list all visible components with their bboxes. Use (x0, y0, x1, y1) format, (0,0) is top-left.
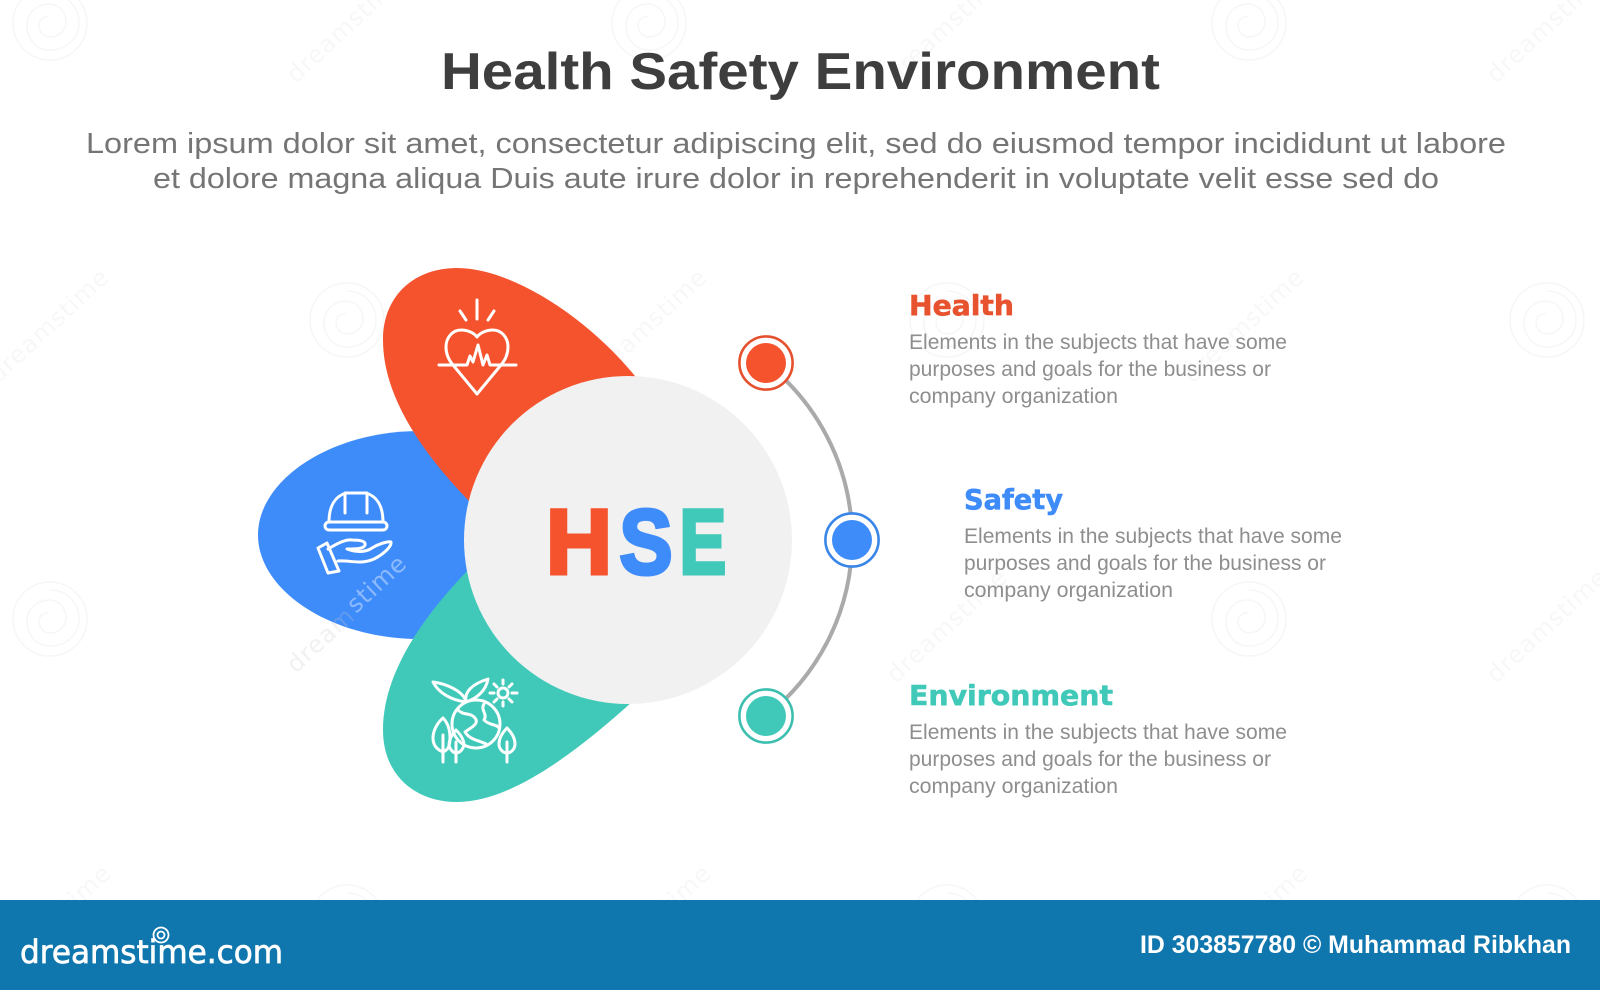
text block: safety (964, 483, 1342, 602)
petal: environment (383, 510, 660, 802)
text block: safety: Safety (964, 483, 1063, 516)
footer bar (0, 900, 1600, 990)
centre label HSE (546, 492, 726, 594)
watermark pattern: dreamstime (1178, 263, 1310, 388)
watermark pattern: dreamstime (581, 263, 713, 388)
text block: health: company organization (909, 385, 1118, 408)
subtitle (86, 128, 1506, 195)
watermark pattern: dreamstime (585, 859, 717, 984)
centre label HSE: H (546, 492, 612, 594)
node: environment (739, 689, 793, 743)
watermark on petals: dream (281, 602, 360, 678)
icon: helmet on hand (318, 493, 391, 573)
connector arc (766, 363, 852, 716)
text block: health: purposes and goals for the business or (909, 358, 1271, 381)
watermark pattern: dreamstime (881, 563, 1013, 688)
text block: environment (909, 679, 1287, 798)
footer logo spiral (154, 928, 168, 942)
text block: health: Health (909, 289, 1014, 322)
text block: safety: Elements in the subjects that have some (964, 525, 1342, 548)
footer credit: ID 303857780 © Muhammad Ribkhan (1140, 931, 1571, 959)
watermark on petals: stime (341, 549, 413, 618)
text block: environment: Environment (909, 679, 1113, 712)
node: safety (825, 513, 879, 567)
watermark on petals (281, 549, 413, 678)
text block: health: Elements in the subjects that have some (909, 331, 1287, 354)
text block: safety: purposes and goals for the business or (964, 552, 1326, 575)
text block: health (909, 289, 1287, 408)
title: Health Safety Environment (441, 43, 1160, 101)
subtitle: Lorem ipsum dolor sit amet, consectetur adipiscing elit, sed do eiusmod tempor incididunt ut labore (86, 128, 1506, 160)
petal: health (383, 268, 660, 560)
centre label HSE: S (620, 492, 672, 594)
text block: environment: Elements in the subjects that have some (909, 721, 1287, 744)
node: health (739, 336, 793, 390)
text block: safety: company organization (964, 579, 1173, 602)
subtitle: et dolore magna aliqua Duis aute irure dolor in reprehenderit in voluptate velit esse sed do (153, 163, 1439, 195)
petal diagram (258, 268, 792, 802)
text block: environment: company organization (909, 775, 1118, 798)
petal: safety (258, 431, 540, 639)
text block: environment: purposes and goals for the business or (909, 748, 1271, 771)
icon: heart with pulse (439, 300, 516, 394)
centre circle (464, 376, 792, 704)
icon: globe with plants (433, 679, 517, 762)
watermark pattern: dreamstime (1182, 859, 1314, 984)
footer logo text: dreamstime.com (20, 933, 283, 971)
centre label HSE: E (680, 492, 726, 594)
